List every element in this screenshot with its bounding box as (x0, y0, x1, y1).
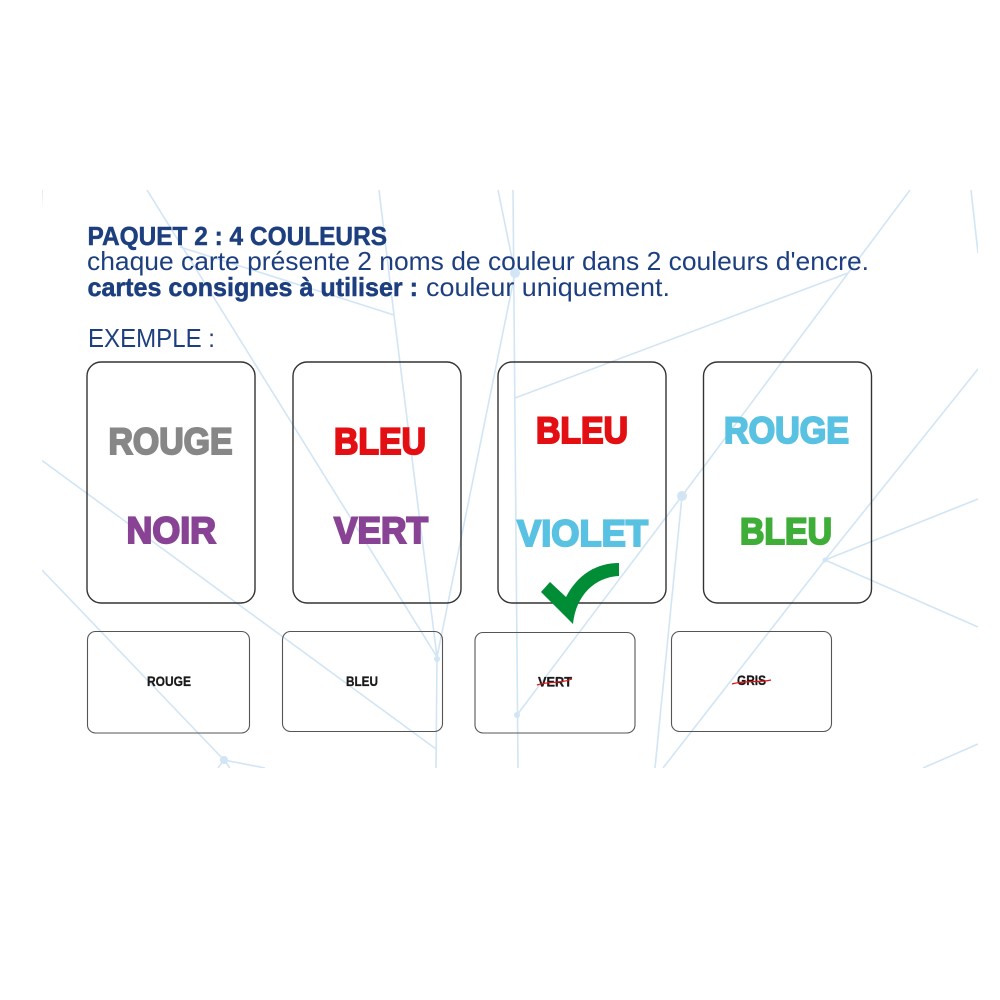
instruction line: couleur uniquement. (426, 272, 670, 302)
card: rouge noir: NOIR (126, 510, 216, 551)
title: PAQUET 2 : 4 COULEURS (88, 221, 387, 251)
card: rouge bleu: BLEU (740, 511, 832, 552)
instruction line: cartes consignes à utiliser : (88, 272, 418, 302)
instruction card: rouge (88, 632, 250, 733)
card: rouge noir: ROUGE (108, 421, 232, 462)
instruction card: bleu (282, 632, 442, 732)
card: bleu violet: BLEU (536, 410, 628, 451)
card: bleu violet (498, 362, 666, 603)
card: rouge noir (87, 362, 255, 603)
example label: EXEMPLE : (88, 323, 215, 353)
description line: chaque carte présente 2 noms de couleur dans 2 couleurs d'encre. (87, 246, 869, 276)
card: bleu violet: VIOLET (517, 513, 648, 554)
instruction card: rouge: ROUGE (147, 674, 191, 689)
instruction card: vert crossed out (475, 632, 635, 733)
card: bleu vert (293, 362, 461, 603)
instruction card: gris crossed out (672, 632, 832, 732)
icon: green check mark (541, 563, 619, 624)
card: rouge bleu: ROUGE (724, 410, 849, 451)
card: rouge bleu (704, 362, 872, 603)
background network lines (40, 190, 978, 768)
instruction card: vert crossed out: VERT (538, 674, 573, 690)
card: bleu vert: BLEU (334, 421, 426, 462)
instruction line (88, 272, 670, 302)
instruction card: bleu: BLEU (346, 674, 378, 689)
card: bleu vert: VERT (334, 510, 428, 551)
instruction card: gris crossed out: GRIS (737, 673, 766, 688)
